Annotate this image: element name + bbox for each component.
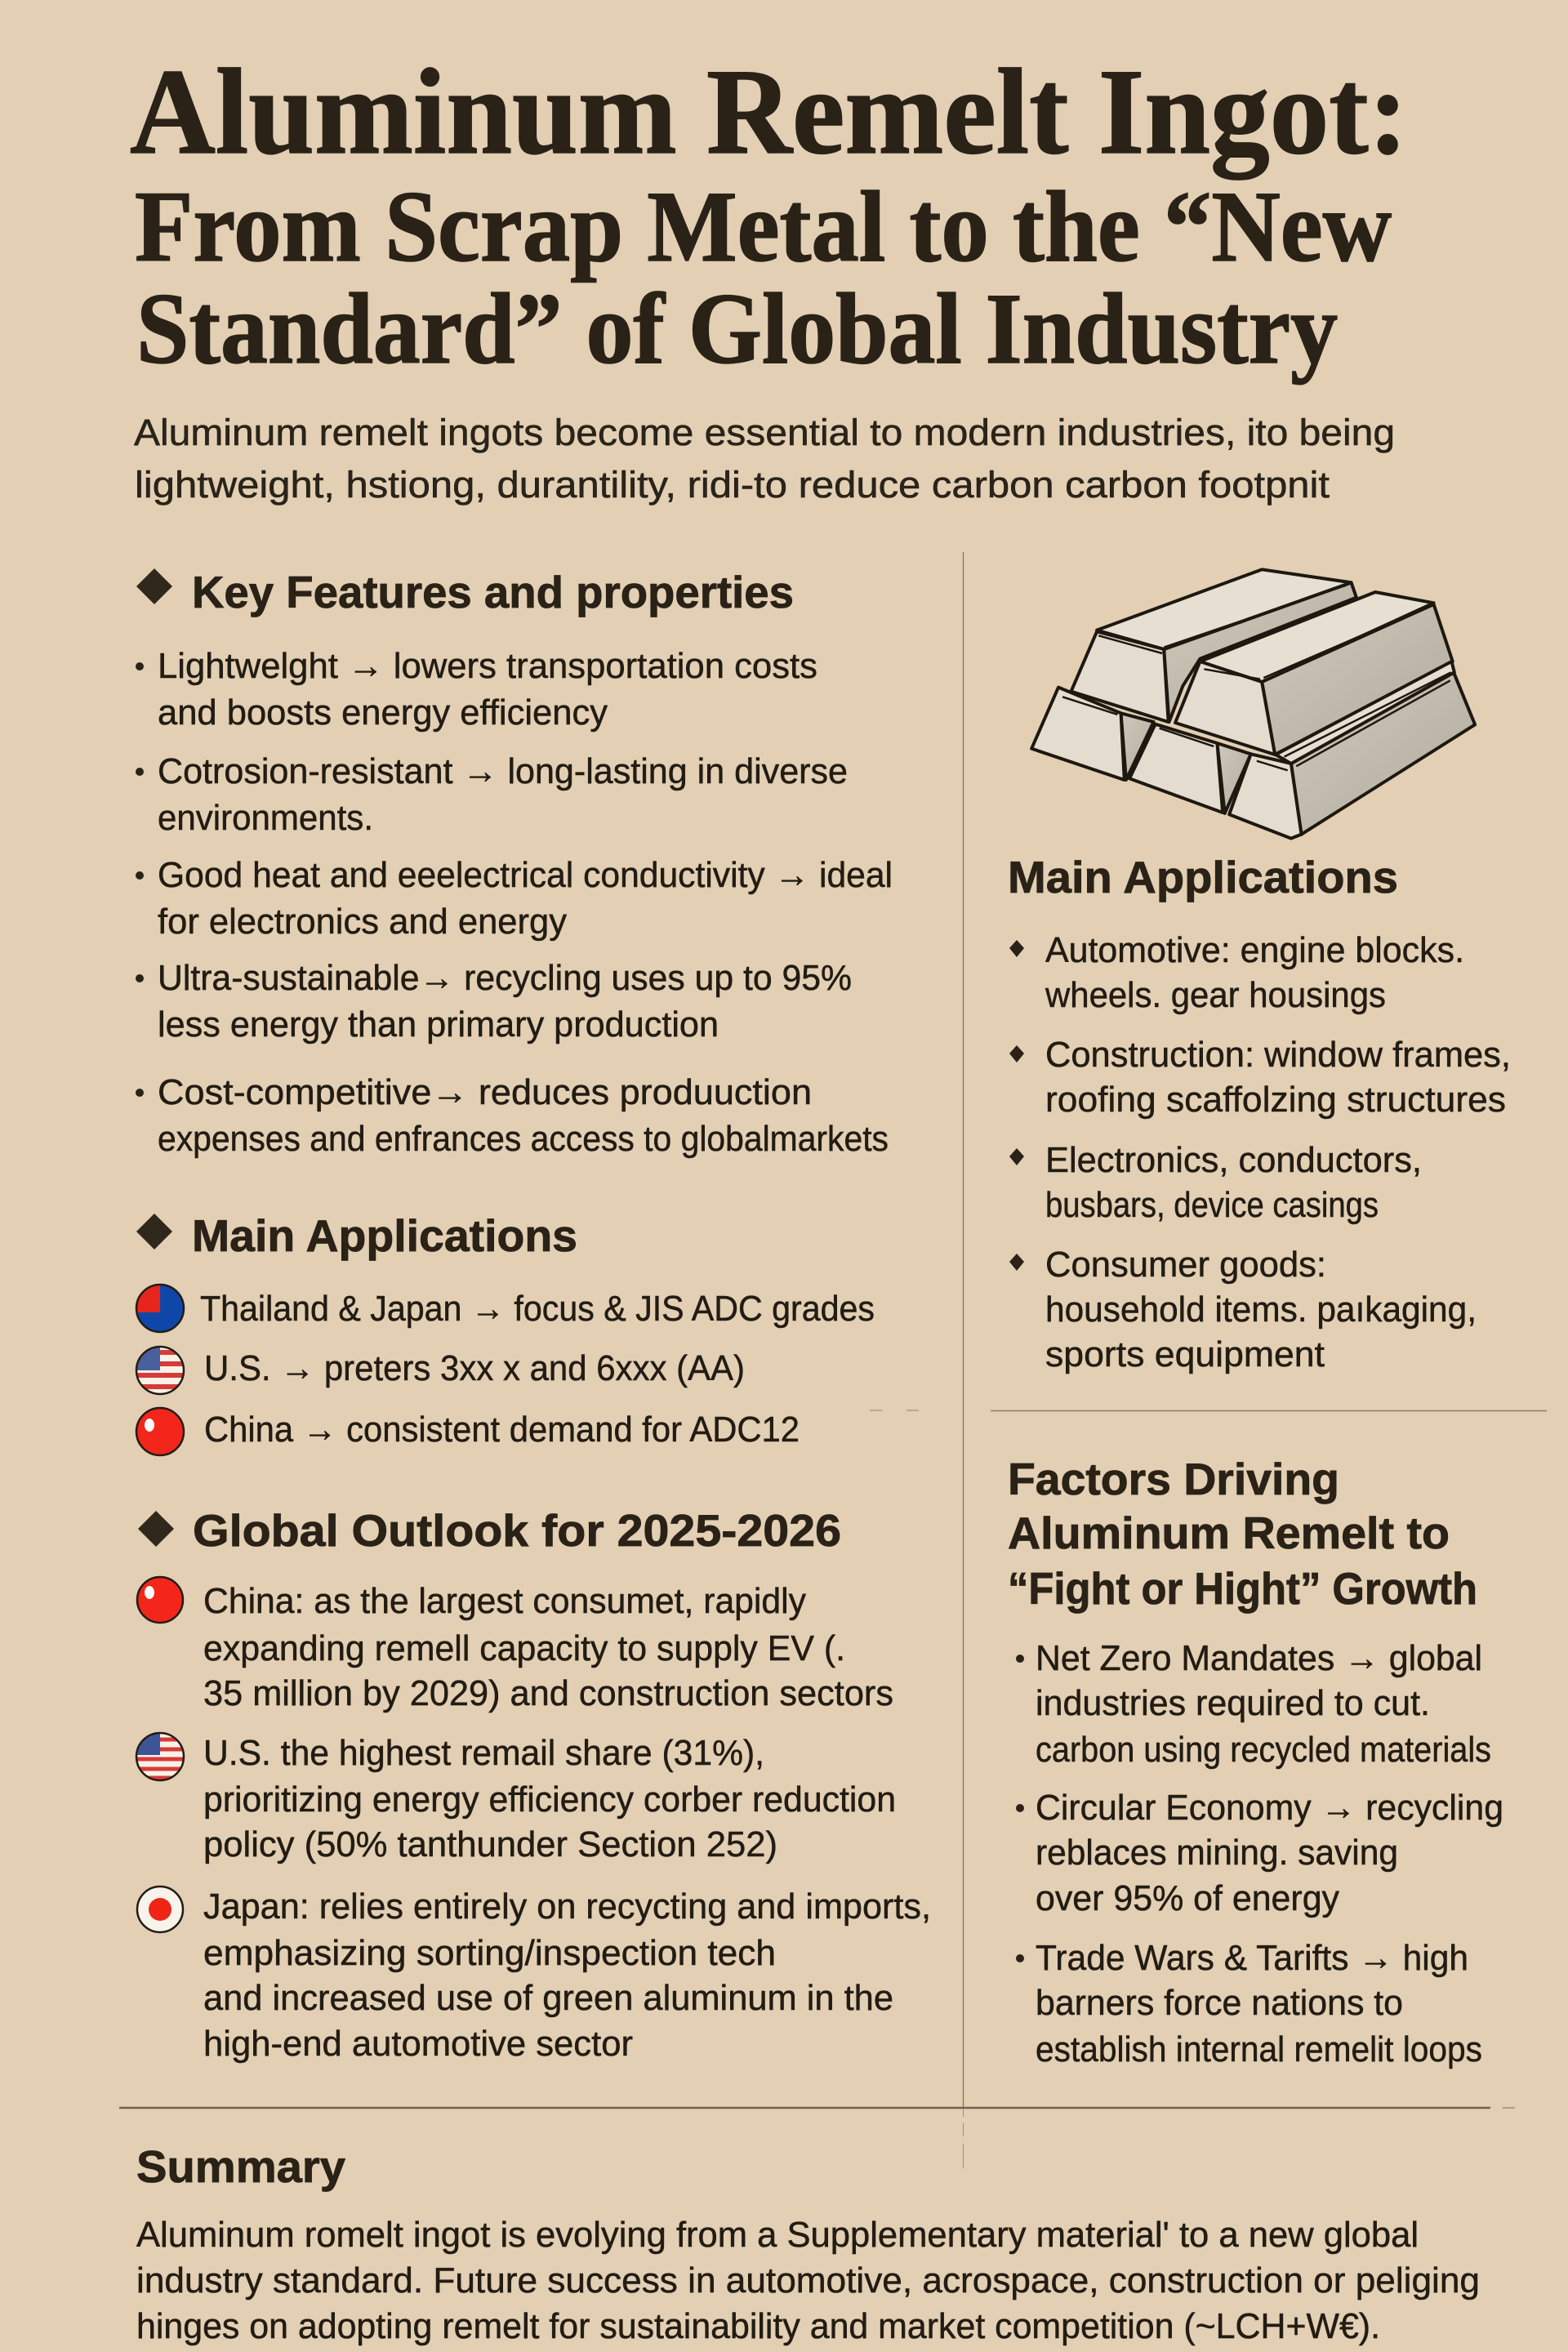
text: China outlook bbox=[203, 1581, 893, 1713]
factor: net zero: industries required to cut. bbox=[1036, 1683, 1430, 1723]
icon: US flag bbox=[136, 1346, 185, 1395]
text: Japan outlook: emphasizing sorting/inspection tech bbox=[203, 1933, 776, 1973]
heading: factors driving: Aluminum Remelt to bbox=[1008, 1508, 1450, 1558]
factor: circular economy bbox=[1016, 1788, 1503, 1918]
icon: China flag bbox=[136, 1408, 184, 1455]
text: Japan outlook: high-end automotive sector bbox=[203, 2024, 633, 2064]
item: automotive: Automotive: engine blocks. bbox=[1045, 930, 1464, 970]
text: summary body: industry standard. Future success in automotive, acrospace, construction or peliging bbox=[136, 2261, 1480, 2301]
feature: conductivity: Good heat and eeelectrical conductivity → ideal bbox=[158, 855, 893, 895]
item: automotive: wheels. gear housings bbox=[1045, 975, 1386, 1015]
heading: main applications: Main Applications bbox=[192, 1210, 577, 1261]
feature: corrosion resistant: Cotrosion-resistant → long-lasting in diverse bbox=[158, 751, 848, 791]
panel: main applications by region bbox=[136, 1210, 875, 1455]
text: China outlook: 35 million by 2029) and construction sectors bbox=[203, 1673, 893, 1713]
title bbox=[130, 44, 1408, 385]
text: Japan outlook: and increased use of green aluminum in the bbox=[203, 1978, 893, 2018]
text: US outlook: prioritizing energy efficiency corber reduction bbox=[203, 1780, 896, 1820]
feature: conductivity bbox=[136, 855, 893, 942]
panel: global outlook bbox=[136, 1505, 931, 2064]
text: US outlook: policy (50% tanthunder Section 252) bbox=[203, 1824, 777, 1864]
feature: cost competitive: Cost-competitive→ reduces produuction bbox=[158, 1072, 812, 1112]
title: Standard” of Global Industry bbox=[136, 273, 1338, 385]
item: automotive bbox=[1009, 930, 1464, 1015]
text: China outlook: China: as the largest consumet, rapidly bbox=[203, 1581, 806, 1621]
factor: circular economy: reblaces mining. saving bbox=[1036, 1833, 1398, 1873]
feature: sustainable bbox=[136, 958, 852, 1045]
heading: global outlook: Global Outlook for 2025-2026 bbox=[193, 1505, 841, 1556]
heading: summary: Summary bbox=[136, 2141, 345, 2192]
item: consumer goods: Consumer goods: bbox=[1045, 1245, 1326, 1285]
title: Aluminum Remelt Ingot: bbox=[130, 44, 1408, 180]
text: China: China → consistent demand for ADC12 bbox=[204, 1410, 800, 1450]
heading: factors driving: “Fight or Hight” Growth bbox=[1008, 1563, 1477, 1614]
text: Japan outlook: Japan: relies entirely on recycting and imports, bbox=[203, 1886, 931, 1927]
item: consumer goods: household items. paıkaging, bbox=[1045, 1290, 1477, 1330]
item: consumer goods: sports equipment bbox=[1045, 1334, 1325, 1374]
icon: China flag bbox=[137, 1577, 183, 1623]
factor: trade wars: Trade Wars & Tarifts → high bbox=[1036, 1938, 1468, 1978]
heading: key features: Key Features and properties bbox=[192, 567, 794, 617]
item: consumer goods bbox=[1009, 1245, 1477, 1374]
item: electronics: busbars, device casings bbox=[1045, 1185, 1379, 1225]
text: China outlook: expanding remell capacity to supply EV (. bbox=[203, 1628, 845, 1668]
feature: lightweight: Lightwelght → lowers transportation costs bbox=[158, 646, 817, 686]
factor: trade wars: barners force nations to bbox=[1036, 1983, 1403, 2023]
factor: circular economy: Circular Economy → recycling bbox=[1036, 1788, 1503, 1828]
feature: sustainable: Ultra-sustainable→ recycling uses up to 95% bbox=[158, 958, 852, 998]
panel: summary bbox=[136, 2141, 1480, 2346]
icon: stacked aluminum ingots bbox=[1031, 569, 1475, 839]
text: US outlook: U.S. the highest remail share (31%), bbox=[203, 1733, 764, 1773]
factor: trade wars bbox=[1016, 1938, 1482, 2069]
feature: lightweight bbox=[136, 646, 817, 733]
text: Thailand and Japan: Thailand & Japan → focus & JIS ADC grades bbox=[200, 1289, 875, 1329]
item: electronics: Electronics, conductors, bbox=[1045, 1140, 1422, 1180]
factor: trade wars: establish internal remelit loops bbox=[1036, 2029, 1482, 2069]
subtitle: Aluminum remelt ingots become essential to modern industries, ito being bbox=[134, 412, 1395, 453]
feature: cost competitive: expenses and enfrances access to globalmarkets bbox=[158, 1119, 889, 1159]
column and section dividers bbox=[119, 552, 1547, 2168]
feature: lightweight: and boosts energy efficiency bbox=[158, 693, 608, 733]
text: summary body bbox=[136, 2215, 1480, 2346]
title: From Scrap Metal to the “New bbox=[135, 171, 1392, 283]
factor: net zero: Net Zero Mandates → global bbox=[1036, 1638, 1482, 1678]
text: summary body: hinges on adopting remelt for sustainability and market competition (~LCH+W€). bbox=[136, 2306, 1380, 2346]
text: summary body: Aluminum romelt ingot is evolying from a Supplementary material' to a new global bbox=[136, 2215, 1419, 2255]
panel: factors driving growth bbox=[1008, 1454, 1503, 2069]
heading: factors driving bbox=[1008, 1454, 1477, 1614]
text: US outlook bbox=[203, 1733, 896, 1864]
factor: net zero bbox=[1016, 1638, 1491, 1770]
subtitle: lightweight, hstiong, durantility, ridi-to reduce carbon carbon footpnit bbox=[135, 464, 1330, 506]
panel: main applications by sector bbox=[1008, 852, 1511, 1374]
text: US: U.S. → preters 3xx x and 6xxx (AA) bbox=[204, 1348, 745, 1388]
feature: cost competitive bbox=[136, 1072, 889, 1159]
item: construction bbox=[1009, 1035, 1511, 1120]
feature: corrosion resistant bbox=[136, 751, 848, 838]
factor: net zero: carbon using recycled materials bbox=[1036, 1730, 1491, 1770]
panel: key features bbox=[136, 567, 893, 1159]
item: construction: roofing scaffolzing structures bbox=[1045, 1080, 1506, 1120]
text: Japan outlook bbox=[203, 1886, 931, 2064]
item: construction: Construction: window frames, bbox=[1045, 1035, 1511, 1075]
heading: main applications right: Main Applications bbox=[1008, 852, 1398, 902]
subtitle bbox=[134, 412, 1395, 506]
feature: conductivity: for electronics and energy bbox=[158, 902, 567, 942]
icon: US flag bbox=[136, 1732, 185, 1781]
heading: factors driving: Factors Driving bbox=[1008, 1454, 1339, 1504]
factor: circular economy: over 95% of energy bbox=[1036, 1878, 1339, 1918]
feature: corrosion resistant: environments. bbox=[158, 798, 373, 838]
icon: Thailand and Japan flag bbox=[136, 1285, 184, 1332]
item: electronics bbox=[1009, 1140, 1422, 1225]
icon: Japan flag bbox=[137, 1886, 183, 1932]
feature: sustainable: less energy than primary production bbox=[158, 1004, 719, 1045]
